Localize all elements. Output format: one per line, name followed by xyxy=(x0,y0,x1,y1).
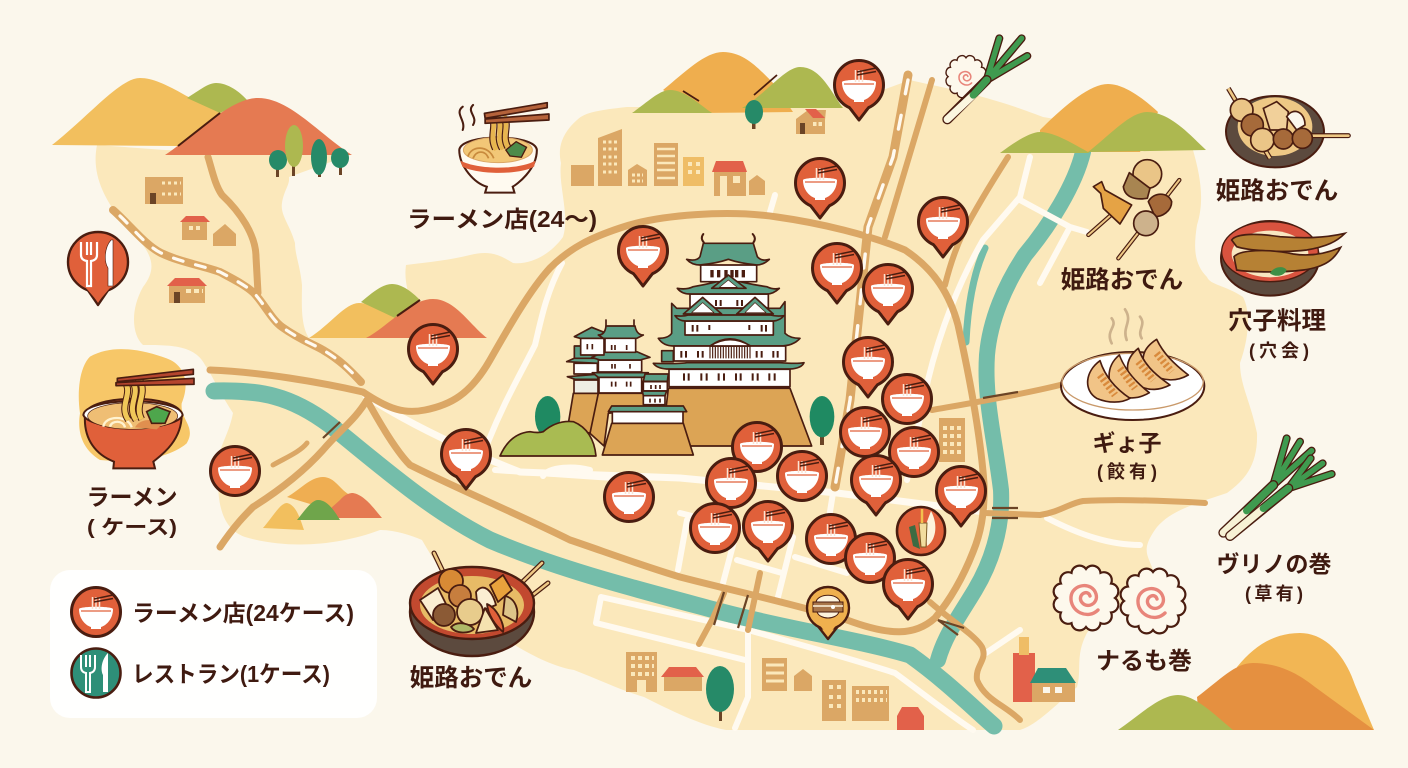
icon: skewers on map xyxy=(1088,160,1179,258)
pin 23 xyxy=(846,534,894,582)
pin: naruto and onion xyxy=(897,507,945,555)
label: Himeji oden top right: 姫路おでん xyxy=(1216,177,1338,205)
pin 5 xyxy=(812,244,862,303)
label: Himeji oden map: 姫路おでん xyxy=(1061,266,1183,294)
building: east block xyxy=(939,418,965,462)
bridges xyxy=(323,392,1018,635)
icon: oden bowl (top right) xyxy=(1226,88,1348,167)
label: onion roll sub: (草有) xyxy=(1245,584,1303,604)
pin 13 xyxy=(732,422,782,472)
pin 4 xyxy=(618,226,668,286)
pin 17 xyxy=(936,466,986,526)
tan roads xyxy=(208,80,1205,720)
legend label: ramen shop: ラーメン店(24ケース) xyxy=(132,600,354,626)
buildings: lower city xyxy=(626,652,924,730)
mountains: top right xyxy=(1000,84,1206,153)
buildings: top left village xyxy=(145,177,236,303)
icon: naruto pair xyxy=(1054,566,1185,633)
pin 8 xyxy=(844,338,892,397)
label: Himeji oden lower: 姫路おでん xyxy=(410,664,532,692)
pin 11 xyxy=(840,408,890,456)
rivers xyxy=(214,152,1083,726)
land map base xyxy=(96,80,1257,730)
icon: anago dish xyxy=(1221,221,1345,296)
pin 14 xyxy=(778,452,826,500)
label: gyoza sub: (餃有) xyxy=(1097,462,1157,482)
pin 7 xyxy=(408,324,458,384)
legend icon: ramen shop xyxy=(72,588,120,636)
pin 12 xyxy=(890,428,938,476)
city buildings: upper xyxy=(571,129,765,196)
pin 9 xyxy=(882,374,932,424)
icon: gyoza plate with steam xyxy=(1061,309,1204,420)
pin: restaurant fork and knife xyxy=(68,232,128,305)
legend panel xyxy=(50,570,377,718)
mountains: bottom right xyxy=(1118,633,1374,730)
pin: gold speciality xyxy=(807,587,849,639)
pin 22 xyxy=(806,514,856,564)
pin 19 xyxy=(210,446,260,496)
label: ramen shops: ラーメン店(24〜) xyxy=(407,206,597,232)
icon: onion and naruto (top) xyxy=(946,38,1027,119)
label: ramen count: ( ケース) xyxy=(87,516,177,539)
legend label: restaurant: レストラン(1ケース) xyxy=(132,661,330,687)
pin 16 xyxy=(852,456,900,515)
tree and house: top centre xyxy=(745,100,826,134)
white streets xyxy=(366,157,1140,730)
pin 15 xyxy=(706,458,756,508)
legend icon: restaurant xyxy=(72,648,120,698)
pin 6 xyxy=(864,264,912,324)
pin 10 xyxy=(442,430,490,489)
pin 3 xyxy=(918,198,968,257)
label: onion roll: ヴリノの巻 xyxy=(1216,551,1332,577)
pin 21 xyxy=(744,502,792,561)
pin 20 xyxy=(690,504,740,552)
buildings: bottom right xyxy=(1013,637,1076,702)
label: naruto roll: ナるも巻 xyxy=(1096,648,1192,675)
mountains: small lower left xyxy=(263,477,382,530)
railway lines xyxy=(113,75,908,487)
icon: green onion (right) xyxy=(1223,438,1332,536)
castle: Himeji xyxy=(500,234,834,456)
label: ramen: ラーメン xyxy=(86,484,178,510)
icon: large ramen bowl with yellow blob xyxy=(79,349,194,468)
label: anago dish: 穴子料理 xyxy=(1228,307,1326,335)
label: gyoza: ギょ子 xyxy=(1092,430,1162,456)
icon: ramen bowl with steam (top) xyxy=(459,103,549,193)
pin 1 xyxy=(834,60,884,120)
mountains: centre left xyxy=(309,284,487,338)
mountains: top centre xyxy=(632,52,843,113)
icon: oden pot (lower left) xyxy=(410,553,548,656)
pin 2 xyxy=(796,158,844,218)
pins: ramen shops xyxy=(210,60,986,619)
label: anago sub: (穴会) xyxy=(1249,341,1309,361)
mountains: top left xyxy=(52,78,352,155)
pin 24 xyxy=(884,560,932,619)
trees: top left xyxy=(269,125,349,177)
pin 18 xyxy=(604,472,654,522)
